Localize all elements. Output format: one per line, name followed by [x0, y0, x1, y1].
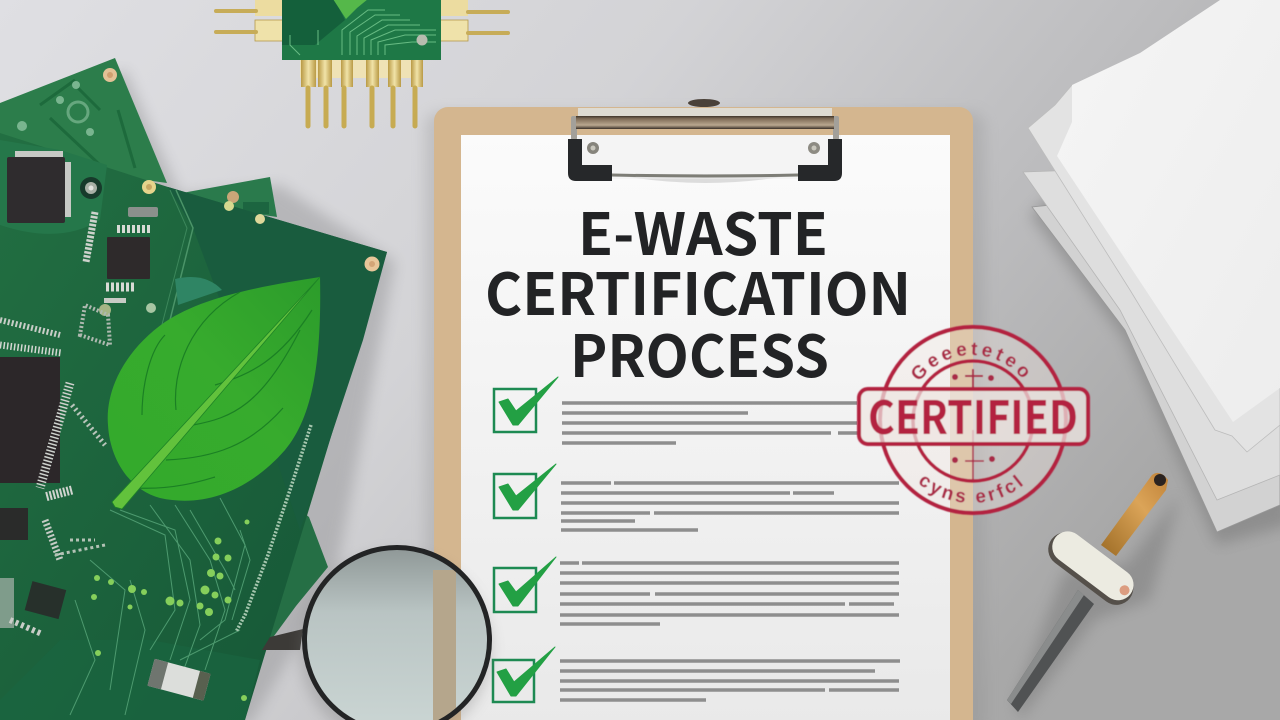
- paper stack: [1023, 0, 1280, 545]
- stamp outer ring: [880, 327, 1066, 513]
- chip board: [282, 0, 441, 60]
- checkbox 3: [494, 557, 556, 612]
- refracted clipboard edge: [433, 570, 456, 720]
- stamp word: CERTIFIED: [868, 382, 1078, 448]
- checklist item 2: [494, 464, 899, 530]
- lower sheet 2: [1023, 170, 1280, 500]
- tool shadow: [1015, 495, 1180, 720]
- title: E-WASTE: [578, 188, 828, 272]
- checklist item 1: [494, 377, 860, 443]
- main circuit board: [0, 133, 387, 720]
- title: [485, 188, 911, 394]
- magnifying glass: [299, 548, 491, 720]
- top sheet: [1057, 0, 1280, 422]
- mounting holes: [99, 180, 380, 316]
- silkscreen text strip: [236, 425, 311, 632]
- stamp banner: [859, 389, 1088, 444]
- shadow of boards: [0, 70, 395, 720]
- clip left foot: [568, 139, 612, 181]
- pin tool: [1007, 473, 1180, 720]
- text lines 2: [561, 483, 899, 530]
- checkbox 4: [493, 647, 555, 702]
- metal shaft: [1007, 590, 1094, 712]
- white oval grip: [1041, 524, 1141, 612]
- title: PROCESS: [570, 310, 829, 394]
- stack shadow: [1030, 150, 1280, 545]
- checkbox 2: [494, 464, 556, 518]
- lower sheet 3: [1028, 85, 1280, 452]
- chip bottom pins: [300, 60, 423, 126]
- title: CERTIFICATION: [485, 248, 911, 332]
- lens ring: [304, 548, 490, 720]
- checklist item 4: [493, 647, 900, 702]
- clip right foot: [798, 139, 842, 181]
- green leaf: [108, 277, 320, 509]
- circuit traces: [70, 498, 250, 715]
- green solder pads: [91, 520, 250, 701]
- stamp inner ring: [913, 361, 1033, 481]
- chip leaf: [333, 0, 368, 19]
- silver component: [147, 659, 211, 701]
- metal clip: [568, 99, 842, 183]
- microchips: [0, 151, 158, 634]
- lower rear board: [262, 510, 328, 650]
- lens shadow: [299, 552, 491, 720]
- clipboard shadow: [425, 112, 985, 720]
- checklist item 3: [494, 557, 899, 624]
- stamp ornaments: [952, 369, 995, 480]
- checkbox 1: [494, 377, 558, 432]
- stamp top text: Geeeteteo: [911, 342, 1029, 380]
- text lines 3: [560, 563, 899, 624]
- chip side pins: [216, 0, 508, 41]
- clipboard backing: [434, 107, 973, 720]
- small rear board: [182, 177, 277, 217]
- stamp disc tint: [879, 326, 1067, 514]
- text lines 4: [560, 661, 900, 700]
- text lines 1: [562, 403, 860, 443]
- lower sheet 1: [1032, 200, 1280, 532]
- circuit boards with leaf: [0, 58, 395, 720]
- gold-pin microchip with leaf: [216, 0, 508, 126]
- board shadow band at bottom left: [262, 629, 303, 650]
- stamp bottom text: cyns erfcl: [919, 474, 1024, 504]
- paper sheet: [461, 135, 950, 720]
- clipboard: [425, 99, 985, 720]
- gold barrel: [1101, 473, 1168, 556]
- glass lens: [305, 548, 489, 720]
- certified stamp: [856, 324, 1091, 516]
- back circuit board: [0, 58, 167, 183]
